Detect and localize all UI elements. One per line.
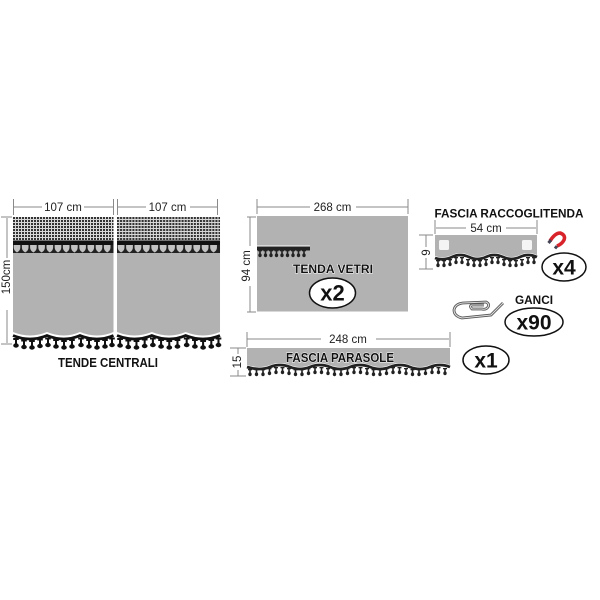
- width dimension: [257, 199, 408, 214]
- height dimension: [1, 217, 13, 344]
- height dimension: 15: [232, 356, 244, 368]
- quantity x4: [542, 253, 586, 281]
- height dimension: [230, 348, 246, 376]
- left curtain: [13, 217, 115, 350]
- heading: tende centrali: TENDE CENTRALI: [58, 356, 158, 370]
- quantity x90: x90: [516, 312, 552, 334]
- fringe: [247, 365, 450, 376]
- height dimension: [419, 235, 433, 269]
- height dimension: 9: [421, 249, 433, 256]
- width dimension: [435, 220, 537, 235]
- panel: tenda vetri: [241, 199, 408, 312]
- quantity x4: x4: [552, 256, 576, 280]
- label: FASCIA PARASOLE: [286, 350, 394, 365]
- fringe: [435, 255, 537, 267]
- right curtain: [117, 217, 221, 350]
- quantity x1: x1: [474, 350, 498, 372]
- panel: fascia raccoglitenda: [419, 208, 586, 281]
- width dimension: [247, 332, 450, 347]
- panel: ganci: [454, 295, 563, 336]
- width dimension: 268 cm: [314, 202, 351, 214]
- height dimension: [241, 217, 256, 312]
- width dimension right: [118, 199, 218, 215]
- heading: GANCI: [515, 295, 553, 307]
- width dimension right: 107 cm: [149, 202, 186, 214]
- label: TENDA VETRI: [293, 262, 373, 276]
- icon: hook: [454, 302, 503, 318]
- quantity x2: x2: [320, 280, 345, 306]
- width dimension left: [14, 199, 114, 215]
- height dimension: 150cm: [1, 260, 13, 294]
- fringe sample: [257, 246, 310, 257]
- width dimension: 54 cm: [470, 223, 502, 235]
- gray panel: [257, 216, 408, 312]
- quantity x1: [463, 346, 509, 374]
- panel: fascia parasole: [230, 332, 509, 376]
- width dimension left: 107 cm: [44, 202, 82, 214]
- width dimension: 248 cm: [329, 334, 367, 346]
- panel: tende centrali: [1, 199, 221, 370]
- quantity x2: [310, 278, 356, 308]
- heading: FASCIA RACCOGLITENDA: [434, 208, 584, 220]
- icon: magnet: [548, 233, 564, 248]
- gray band with slots: [435, 235, 537, 257]
- height dimension: 94 cm: [241, 250, 253, 282]
- gray band: [247, 348, 450, 367]
